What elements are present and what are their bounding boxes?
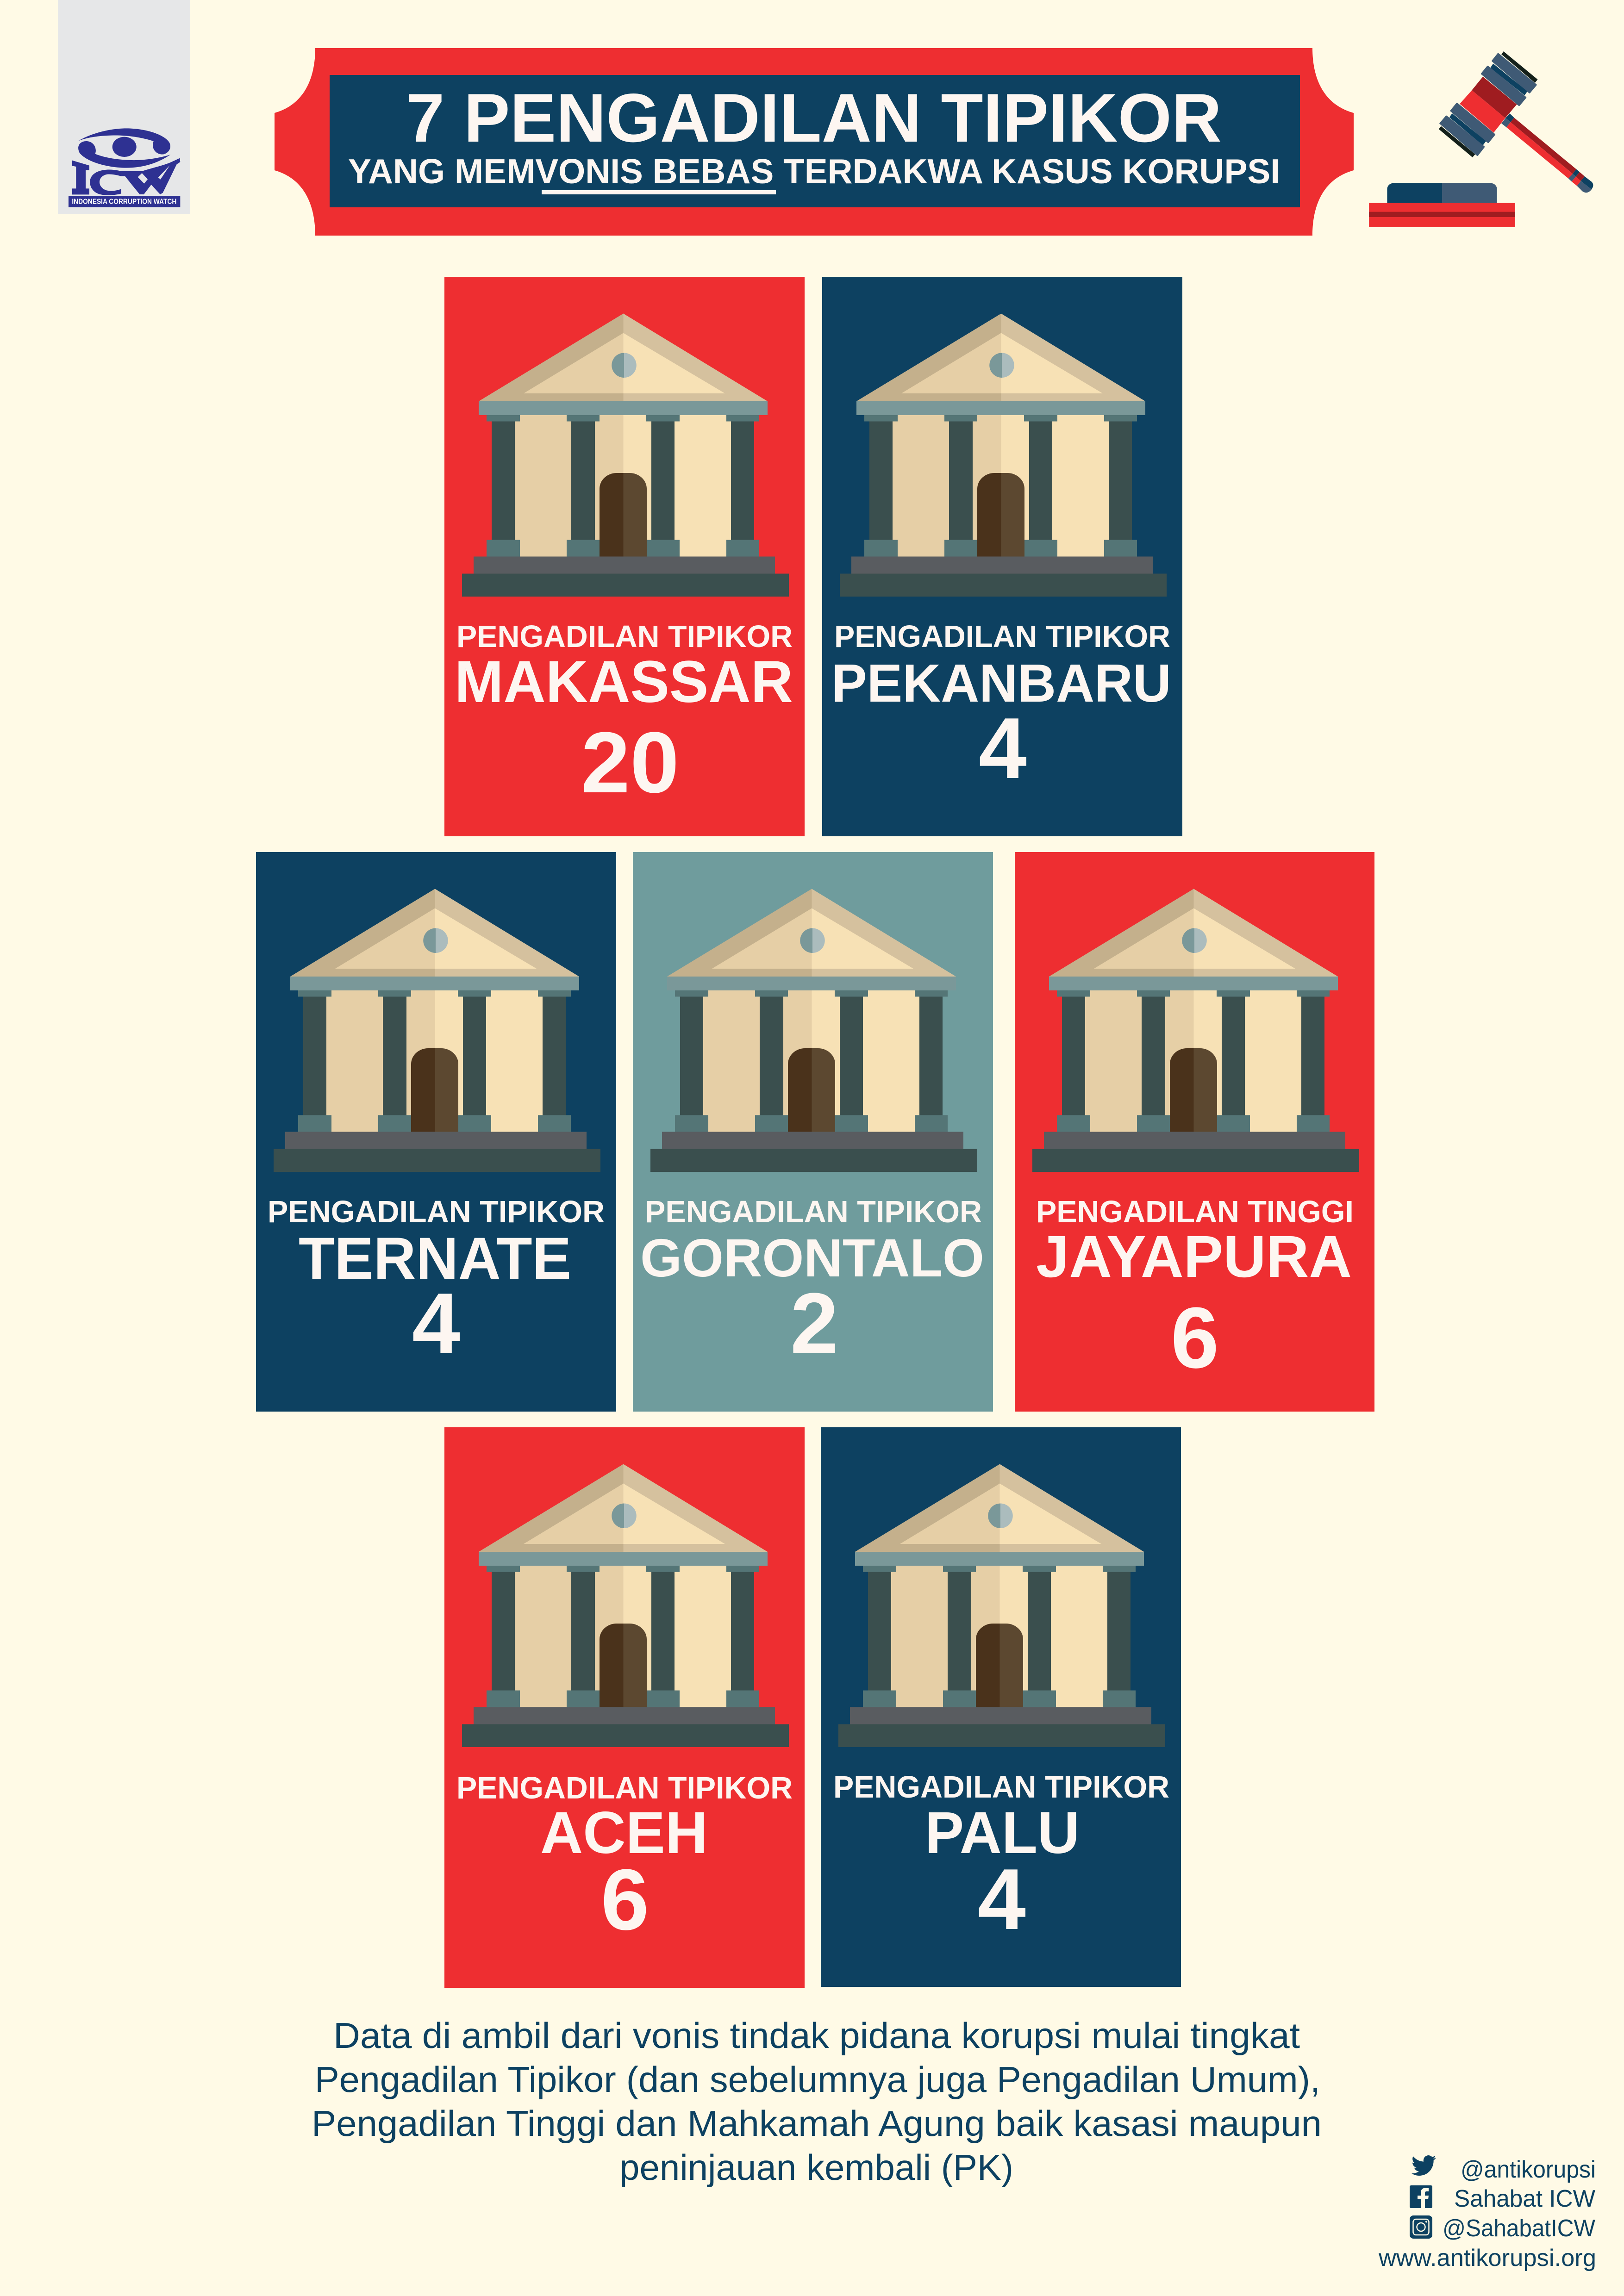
court type label: PENGADILAN TIPIKOR (456, 1771, 793, 1805)
underline on "vonis bebas" (542, 190, 776, 194)
icon: court building (840, 314, 1167, 597)
acquittal count: 6 (601, 1851, 649, 1948)
icon: instagram (1410, 2215, 1432, 2239)
court type label: PENGADILAN TIPIKOR (834, 619, 1170, 654)
icon: judge's gavel and sound block (1369, 51, 1593, 227)
acquittal count: 4 (412, 1275, 460, 1372)
court city: TERNATE (299, 1226, 571, 1292)
icon: facebook (1410, 2185, 1432, 2208)
court city: MAKASSAR (455, 649, 793, 715)
title text: 7 PENGADILAN TIPIKOR (406, 79, 1222, 156)
icon: twitter (1412, 2155, 1436, 2176)
icon: court building (1032, 889, 1359, 1172)
source note: peninjauan kembali (PK) (619, 2147, 1013, 2188)
court city: GORONTALO (640, 1228, 984, 1288)
acquittal count: 6 (1171, 1289, 1219, 1386)
court city: PEKANBARU (831, 653, 1171, 713)
logo: Indonesia Corruption Watch (58, 0, 190, 214)
acquittal count: 2 (790, 1275, 838, 1372)
court city: ACEH (540, 1800, 708, 1866)
court city: PALU (925, 1800, 1080, 1866)
panel: Makassar (444, 277, 805, 836)
acquittal count: 4 (978, 1851, 1026, 1948)
website: www.antikorupsi.org (1378, 2245, 1596, 2271)
source note (312, 2015, 1322, 2188)
title banner (275, 48, 1354, 236)
source note: Pengadilan Tipikor (dan sebelumnya juga Pengadilan Umum), (315, 2059, 1320, 2100)
panel: Ternate (256, 852, 616, 1412)
icon: court building (838, 1464, 1165, 1747)
panel: Gorontalo (633, 852, 993, 1412)
court type label: PENGADILAN TIPIKOR (645, 1195, 982, 1229)
icon: court building (462, 1464, 789, 1747)
panel: Aceh (444, 1427, 805, 1988)
acquittal count: 4 (979, 700, 1027, 796)
court type label: PENGADILAN TIPIKOR (268, 1195, 605, 1229)
instagram handle: @SahabatICW (1443, 2215, 1595, 2242)
panel: Palu (821, 1427, 1181, 1987)
source note: Pengadilan Tinggi dan Mahkamah Agung baik kasasi maupun (312, 2103, 1322, 2144)
panel: Jayapura (1015, 852, 1374, 1412)
panel: Pekanbaru (822, 277, 1182, 836)
icon: court building (462, 314, 789, 597)
court city: JAYAPURA (1036, 1224, 1352, 1290)
facebook name: Sahabat ICW (1454, 2185, 1595, 2212)
social media contacts (1378, 2155, 1596, 2271)
subtitle text: YANG MEMVONIS BEBAS TERDAKWA KASUS KORUPSI (348, 152, 1280, 191)
icon: court building (274, 889, 600, 1172)
icon: court building (650, 889, 977, 1172)
court type label: PENGADILAN TINGGI (1036, 1195, 1354, 1229)
court type label: PENGADILAN TIPIKOR (456, 619, 793, 654)
source note: Data di ambil dari vonis tindak pidana korupsi mulai tingkat (333, 2015, 1300, 2056)
twitter handle: @antikorupsi (1461, 2156, 1596, 2183)
logo: Indonesia Corruption Watch: INDONESIA CORRUPTION WATCH (72, 198, 176, 206)
court type label: PENGADILAN TIPIKOR (833, 1770, 1169, 1804)
acquittal count: 20 (581, 714, 679, 811)
